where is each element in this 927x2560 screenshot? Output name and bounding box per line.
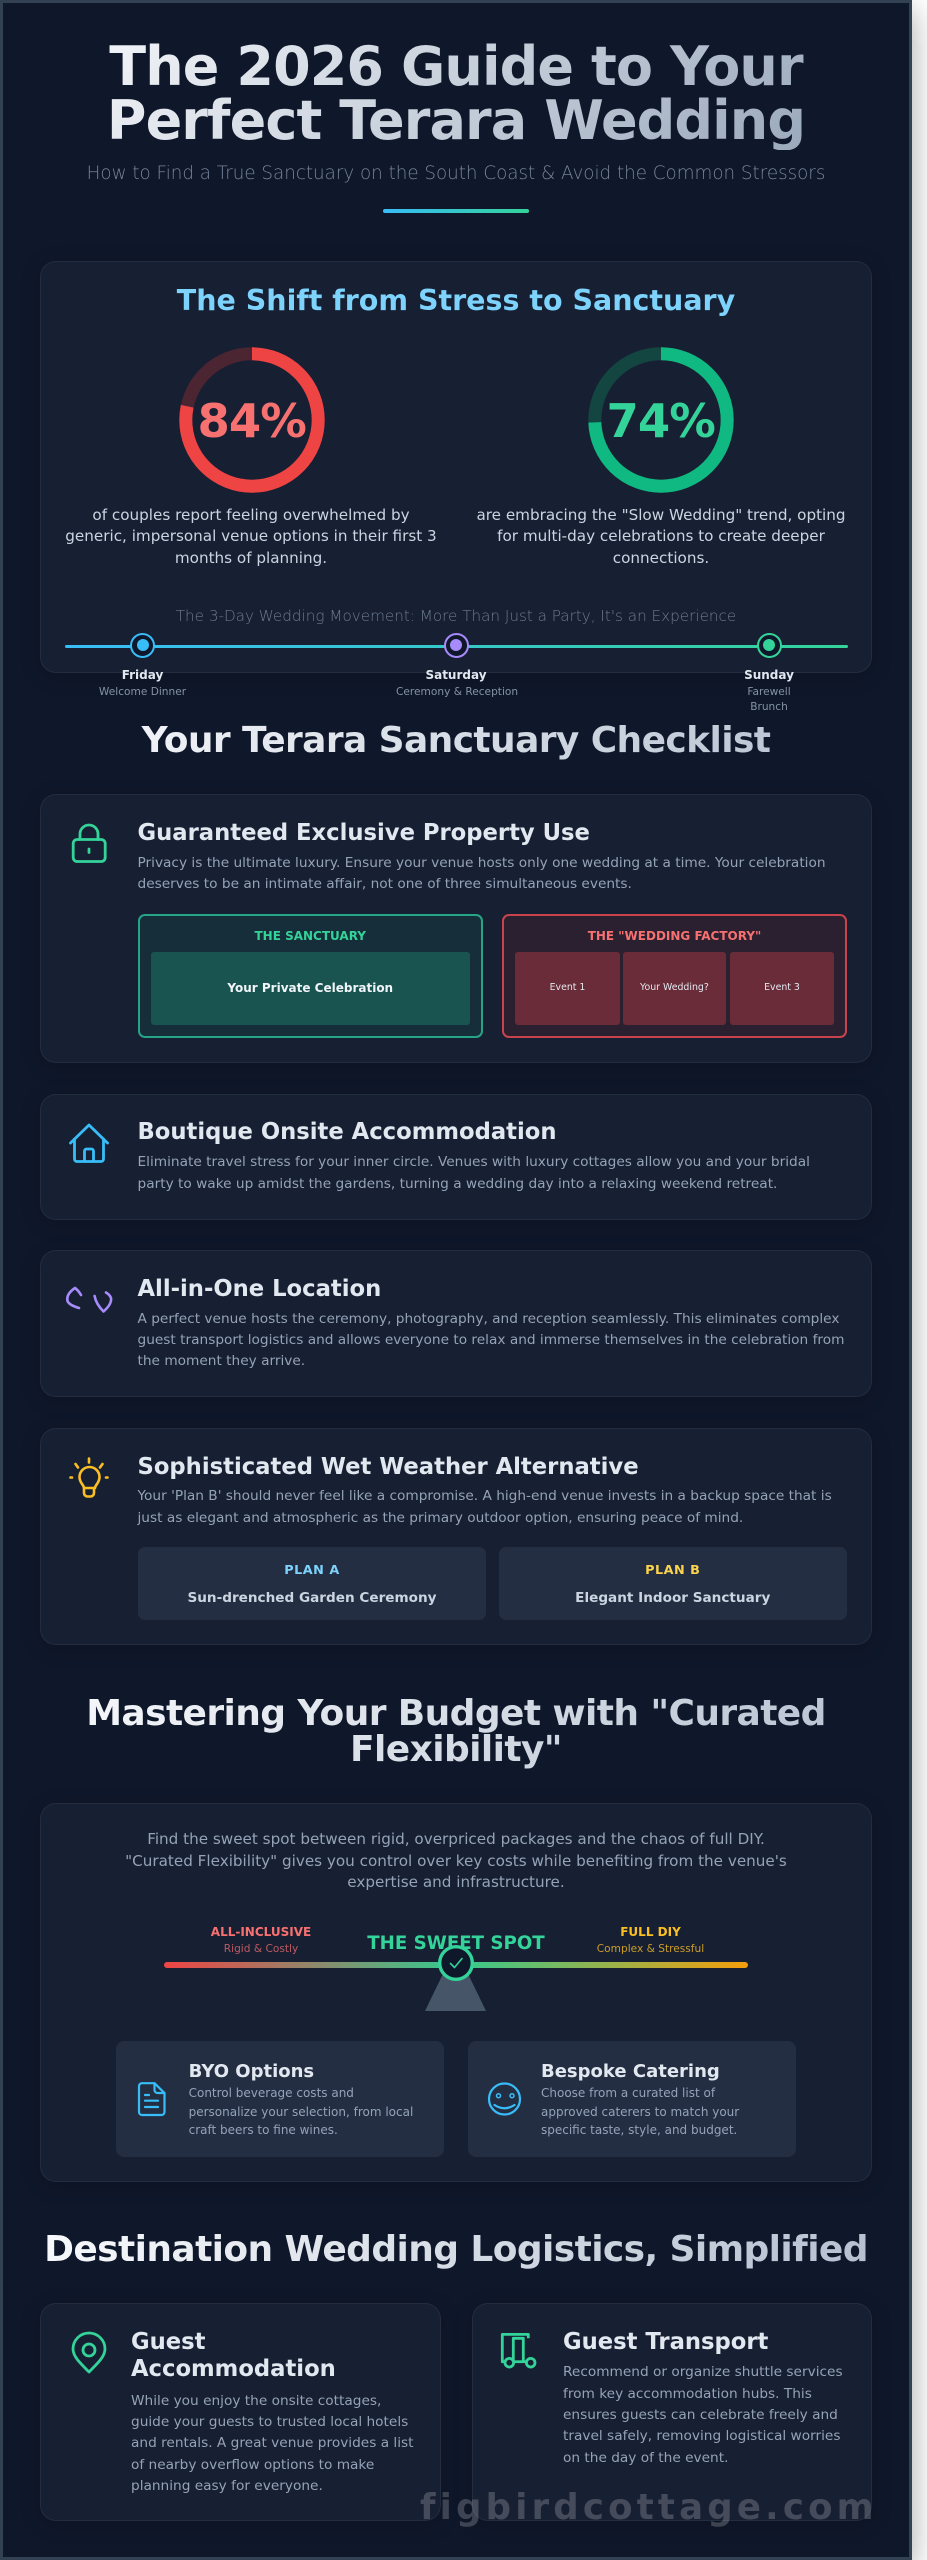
card text: Your 'Plan B' should never feel like a compromise. A high-end venue invests in a backup space that is — [138, 1488, 832, 1504]
sublabel: farewell brunch: Brunch — [750, 701, 788, 713]
icon: house — [69, 1124, 109, 1163]
option text: personalize your selection, from local — [189, 2105, 413, 2119]
event 1 block: Event 1 — [550, 982, 585, 993]
card text: A perfect venue hosts the ceremony, photography, and reception seamlessly. This eliminates complex — [138, 1311, 839, 1327]
panel: shift from stress to sanctuary — [40, 261, 872, 673]
card text — [138, 1154, 810, 1192]
stat value: 74%: 74% — [607, 394, 715, 448]
watermark: figbirdcottage.com — [420, 2487, 878, 2528]
sublabel: ceremony and reception: Ceremony & Reception — [396, 686, 518, 698]
title: Perfect Terara Wedding — [107, 89, 805, 152]
card text: party to wake up amidst the gardens, turning a wedding day into a relaxing weekend retreat. — [138, 1176, 777, 1192]
donut chart: 74% — [588, 347, 734, 493]
event 3 block — [730, 952, 834, 1025]
card text: guest transport logistics and allows everyone to relax and immerse themselves in the celebration from — [138, 1332, 844, 1348]
option heading: Bespoke Catering — [541, 2061, 720, 2082]
plan a description: Sun-drenched Garden Ceremony — [187, 1590, 437, 1606]
panel: curated flexibility — [40, 1803, 872, 2182]
timeline title: The 3-Day Wedding Movement: More Than Just a Party, It's an Experience — [176, 607, 736, 625]
scale bar — [164, 1962, 748, 1968]
sublabel: farewell brunch: Farewell — [747, 686, 791, 698]
subtitle: How to Find a True Sanctuary on the South Coast & Avoid the Common Stressors — [87, 163, 825, 184]
card text: Privacy is the ultimate luxury. Ensure your venue hosts only one wedding at a time. Your celebration — [138, 855, 826, 871]
option text: Control beverage costs and — [189, 2086, 354, 2100]
plan b box — [498, 1547, 847, 1620]
sweet spot marker with check — [438, 1945, 474, 1981]
title: The 2026 Guide to Your — [109, 35, 803, 98]
label: saturday: Saturday — [425, 668, 487, 682]
donut chart: 84% — [179, 347, 325, 493]
factory label: THE "WEDDING FACTORY" — [588, 929, 761, 943]
marker: sunday — [756, 632, 782, 658]
card text: Recommend or organize shuttle services — [563, 2364, 843, 2380]
event 3 block: Event 3 — [764, 982, 800, 993]
icon: light bulb — [69, 1457, 109, 1498]
section heading: logistics: Destination Wedding Logistics, Simplified — [44, 2229, 868, 2270]
event 1 block — [515, 952, 620, 1025]
card heading: Guest — [131, 2329, 206, 2355]
title — [40, 40, 872, 150]
card text: deserves to be an intimate affair, not one of three simultaneous events. — [138, 876, 632, 892]
panel: guest accommodation — [40, 2303, 440, 2521]
card text — [138, 855, 826, 892]
stat description: overwhelmed couples: months of planning. — [175, 549, 327, 567]
plan b description: Elegant Indoor Sanctuary — [575, 1590, 770, 1606]
stat description: slow wedding: connections. — [613, 549, 709, 567]
stat description: slow wedding — [476, 506, 846, 567]
option text: specific taste, style, and budget. — [541, 2123, 737, 2137]
panel: wet weather alternative — [40, 1428, 872, 1645]
section heading: budget: Mastering Your Budget with "Curated — [86, 1693, 826, 1734]
panel heading: The Shift from Stress to Sanctuary — [177, 284, 735, 317]
plan b label: PLAN B — [645, 1563, 700, 1578]
card text: travel safely, removing logistical worries — [563, 2428, 840, 2444]
panel: exclusive property use — [40, 794, 872, 1063]
icon: linked arcs — [66, 1286, 112, 1313]
sublabel: welcome dinner: Welcome Dinner — [99, 686, 186, 698]
stat description: slow wedding: are embracing the "Slow Wedding" trend, opting — [476, 506, 846, 524]
stat description: overwhelmed couples: of couples report feeling overwhelmed by — [92, 506, 410, 524]
card text: Eliminate travel stress for your inner circle. Venues with luxury cottages allow you and your bridal — [138, 1154, 810, 1170]
your wedding block: Your Wedding? — [640, 982, 709, 993]
card text: of nearby overflow options to make — [131, 2457, 374, 2473]
panel: guest transport — [472, 2303, 872, 2521]
icon: shuttle — [500, 2333, 536, 2368]
card text: guide your guests to trusted local hotels — [131, 2414, 408, 2430]
panel: boutique accommodation — [40, 1094, 872, 1220]
card heading — [131, 2329, 336, 2382]
sublabel: farewell brunch — [747, 686, 791, 713]
your wedding block — [623, 952, 726, 1025]
stat description: overwhelmed couples — [65, 506, 437, 567]
option: bespoke catering — [468, 2041, 796, 2157]
option text — [541, 2086, 740, 2137]
label: full diy: FULL DIY — [620, 1925, 681, 1939]
private celebration block: Your Private Celebration — [227, 981, 393, 995]
label: friday: Friday — [122, 668, 163, 682]
option heading: BYO Options — [189, 2061, 314, 2082]
label: the sweet spot: THE SWEET SPOT — [367, 1933, 545, 1954]
panel: all-in-one location — [40, 1250, 872, 1397]
label: all-inclusive: ALL-INCLUSIVE — [211, 1925, 311, 1939]
intro text: expertise and infrastructure. — [347, 1873, 565, 1891]
plan a label: PLAN A — [284, 1563, 340, 1578]
card heading: Guaranteed Exclusive Property Use — [138, 820, 590, 846]
icon: document — [138, 2082, 166, 2116]
card heading: All-in-One Location — [138, 1276, 381, 1302]
card heading: Sophisticated Wet Weather Alternative — [138, 1454, 639, 1480]
stat description: overwhelmed couples: generic, impersonal venue options in their first 3 — [65, 527, 437, 545]
intro text: Find the sweet spot between rigid, overpriced packages and the chaos of full DIY. — [147, 1830, 765, 1848]
timeline line — [64, 645, 848, 648]
card text — [137, 1488, 832, 1526]
option text: craft beers to fine wines. — [189, 2123, 338, 2137]
scale pivot — [425, 1975, 486, 2011]
comparison: the wedding factory — [502, 914, 847, 1038]
intro text: "Curated Flexibility" gives you control over key costs while benefiting from the venue's — [125, 1852, 787, 1870]
icon: smiling face — [488, 2082, 522, 2116]
icon: map pin — [72, 2332, 106, 2374]
sublabel: rigid and costly: Rigid & Costly — [224, 1943, 298, 1955]
card text: planning easy for everyone. — [131, 2478, 323, 2494]
section heading: budget: Flexibility" — [350, 1729, 562, 1770]
card text: from key accommodation hubs. This — [563, 2386, 812, 2402]
card text: While you enjoy the onsite cottages, — [131, 2393, 381, 2409]
card text: ensures guests can celebrate freely and — [563, 2407, 838, 2423]
label: sunday: Sunday — [744, 668, 794, 682]
comparison: the sanctuary — [138, 914, 482, 1038]
card heading: Accommodation — [131, 2356, 336, 2382]
card text: the moment they arrive. — [138, 1353, 305, 1369]
intro text — [125, 1830, 787, 1891]
icon: padlock — [72, 824, 107, 863]
sanctuary label: THE SANCTUARY — [254, 929, 366, 943]
card text: on the day of the event. — [563, 2450, 728, 2466]
card text: and rentals. A great venue provides a list — [131, 2435, 414, 2451]
card text: just as elegant and atmospheric as the primary outdoor option, ensuring peace of mind. — [138, 1510, 743, 1526]
option: byo — [116, 2041, 444, 2157]
header divider — [383, 209, 529, 213]
card text — [563, 2364, 843, 2466]
section heading: budget — [40, 1696, 872, 1772]
marker: saturday — [444, 632, 468, 658]
option text: approved caterers to match your — [541, 2105, 739, 2119]
option text: Choose from a curated list of — [541, 2086, 715, 2100]
option text — [189, 2086, 413, 2137]
private celebration block — [151, 952, 470, 1025]
plan a box — [138, 1547, 486, 1620]
marker: friday — [130, 632, 155, 658]
card text — [131, 2393, 414, 2494]
stat description: slow wedding: for multi-day celebrations to create deeper — [497, 527, 825, 545]
section heading: checklist: Your Terara Sanctuary Checklist — [142, 720, 770, 761]
timeline: 3-day wedding movement — [65, 607, 848, 713]
card text — [138, 1311, 844, 1369]
stat value: 84%: 84% — [198, 394, 306, 448]
card heading: Boutique Onsite Accommodation — [138, 1119, 556, 1145]
sublabel: complex and stressful: Complex & Stressful — [597, 1943, 704, 1955]
card heading: Guest Transport — [563, 2329, 768, 2355]
